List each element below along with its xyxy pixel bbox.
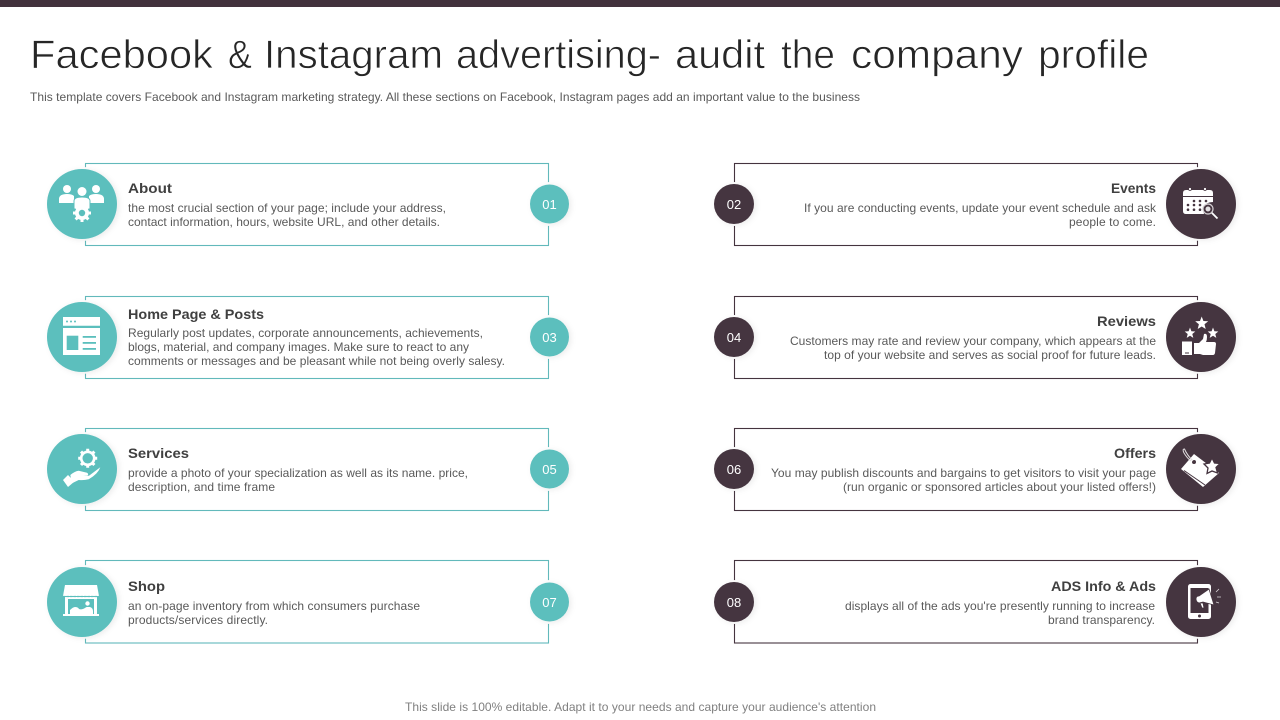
panel: Services: [45, 428, 572, 510]
icon: price tag with star: [1166, 434, 1236, 504]
heading: Events: [1111, 180, 1156, 196]
heading: About: [128, 180, 172, 196]
title: Instagram: [264, 33, 443, 77]
footer note: This slide is 100% editable. Adapt it to your needs and capture your audience's attention: [405, 700, 876, 714]
icon: hand holding gear: [47, 434, 117, 504]
top bar: [0, 0, 1280, 7]
heading: ADS Info & Ads: [1051, 578, 1156, 594]
panel: Reviews: [712, 296, 1238, 378]
number badge: [714, 582, 754, 622]
title: profile: [1038, 33, 1149, 77]
number badge: [714, 449, 754, 489]
description: [128, 599, 420, 627]
number badge: 02: [727, 197, 741, 212]
heading: Reviews: [1097, 313, 1156, 329]
description: [845, 599, 1155, 627]
description: [128, 466, 468, 494]
description: comments or messages and be pleasant while not being overly salesy.: [128, 354, 505, 368]
description: [804, 201, 1157, 229]
description: an on-page inventory from which consumers purchase: [128, 599, 420, 613]
panel: Events: [712, 164, 1238, 246]
subtitle: This template covers Facebook and Instagram marketing strategy. All these sections on Facebook, Instagram pages add an important value to the business: [30, 90, 860, 104]
panel: Offers: [712, 428, 1238, 510]
description: the most crucial section of your page; include your address,: [128, 201, 446, 215]
title: audit: [675, 33, 765, 77]
description: top of your website and serves as social proof for future leads.: [824, 348, 1156, 362]
icon: team with gear: [47, 169, 117, 239]
description: [790, 334, 1156, 362]
number badge: 03: [542, 330, 557, 345]
description: provide a photo of your specialization as well as its name. price,: [128, 466, 468, 480]
description: description, and time frame: [128, 480, 275, 494]
title: advertising-: [456, 33, 661, 77]
panel: Home Page & Posts: [45, 296, 572, 378]
title: the: [781, 33, 835, 77]
description: people to come.: [1069, 215, 1156, 229]
number badge: 04: [727, 330, 741, 345]
description: contact information, hours, website URL, and other details.: [128, 215, 440, 229]
number badge: [530, 582, 569, 622]
heading: Offers: [1114, 445, 1156, 461]
description: (run organic or sponsored articles about your listed offers!): [843, 480, 1156, 494]
panel: Shop: [45, 560, 572, 643]
description: [128, 201, 446, 229]
icon: storefront: [47, 567, 117, 637]
number badge: [714, 184, 754, 224]
icon: phone with megaphone: [1166, 567, 1236, 637]
description: If you are conducting events, update your event schedule and ask: [804, 201, 1157, 215]
description: blogs, material, and company images. Make sure to react to any: [128, 340, 469, 354]
panel: ADS Info & Ads: [712, 560, 1238, 643]
number badge: [530, 318, 569, 356]
number badge: 05: [542, 462, 557, 477]
number badge: [530, 450, 569, 488]
description: Regularly post updates, corporate announcements, achievements,: [128, 326, 483, 340]
title: &: [228, 33, 252, 77]
number badge: 01: [542, 197, 557, 212]
heading: Shop: [128, 578, 165, 594]
title: [30, 33, 1149, 77]
heading: Home Page & Posts: [128, 306, 264, 322]
number badge: 08: [727, 595, 741, 610]
description: [771, 466, 1156, 494]
description: products/services directly.: [128, 613, 268, 627]
description: Customers may rate and review your company, which appears at the: [790, 334, 1156, 348]
number badge: [714, 317, 754, 357]
description: [128, 326, 505, 368]
description: brand transparency.: [1048, 613, 1155, 627]
title: company: [851, 33, 1023, 77]
description: displays all of the ads you're presently running to increase: [845, 599, 1155, 613]
number badge: [530, 184, 569, 224]
icon: stars and thumbs up: [1166, 302, 1236, 372]
icon: calendar with magnifier: [1166, 169, 1236, 239]
panel: About: [45, 164, 572, 246]
number badge: 07: [542, 595, 557, 610]
icon: web page layout: [47, 302, 117, 372]
title: Facebook: [30, 33, 214, 77]
number badge: 06: [727, 462, 741, 477]
heading: Services: [128, 445, 189, 461]
description: You may publish discounts and bargains to get visitors to visit your page: [771, 466, 1156, 480]
